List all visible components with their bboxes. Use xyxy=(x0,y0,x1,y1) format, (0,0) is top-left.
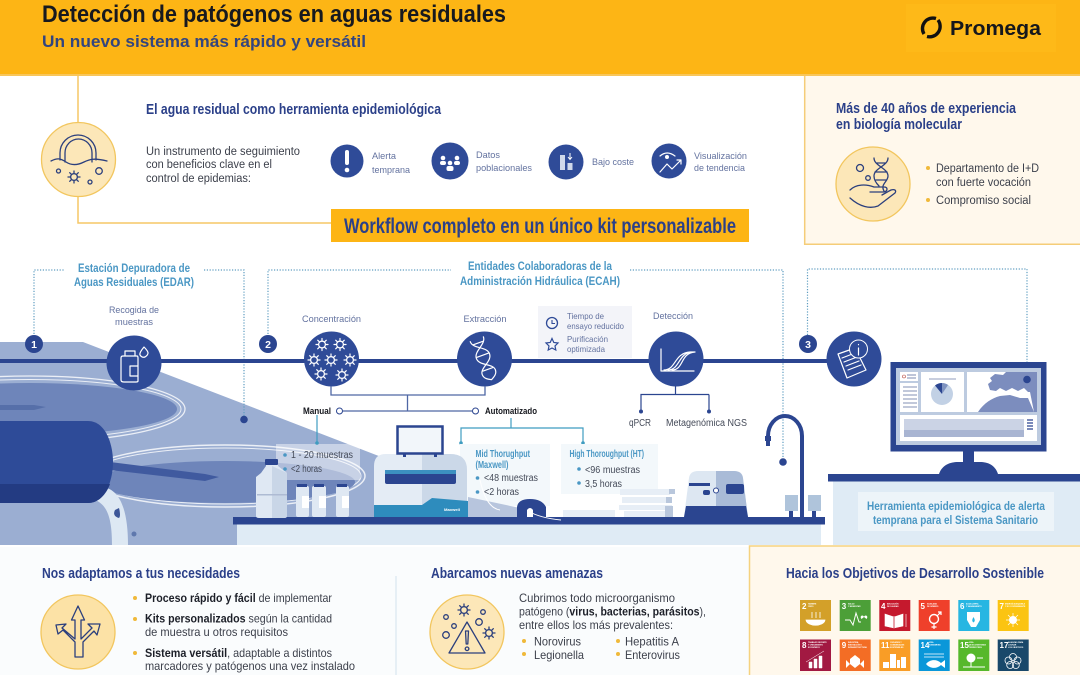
list: pathogens: Legionella xyxy=(534,648,584,662)
label: population data: poblacionales xyxy=(476,163,532,174)
tile: SDG 11: 11 xyxy=(881,641,890,650)
icon: population data xyxy=(432,142,468,180)
tile: SDG 15: DE ECOSISTEMAS xyxy=(969,644,987,646)
label: trend visualisation: de tendencia xyxy=(694,163,746,174)
label: trend visualisation: Visualización xyxy=(694,151,747,162)
step: detection xyxy=(648,311,704,386)
tile: SDG 5: DE GÉNERO xyxy=(927,605,939,608)
dashboard: time series xyxy=(900,415,1037,441)
list: adaptation points: Sistema versátil, adaptable a distintos xyxy=(145,646,332,660)
intro text xyxy=(146,146,300,185)
callout: mid throughput: Mid Thorughput xyxy=(476,448,530,460)
heading: ECAH xyxy=(460,259,620,288)
label: manual: Manual xyxy=(303,406,331,417)
callout: reduced time and optimised purification xyxy=(538,306,632,358)
heading: Abarcamos nuevas amenazas xyxy=(431,565,603,582)
tile: SDG 14: SUBMARINA xyxy=(929,644,941,646)
label: metagenomics NGS: Metagenómica NGS xyxy=(666,418,747,429)
step: reporting icon xyxy=(826,332,882,386)
list: pathogens: Hepatitis A xyxy=(625,634,679,648)
tank 1 xyxy=(0,376,185,442)
tile: SDG 8: 8 xyxy=(802,641,807,650)
tile: SDG 6: AGUA LIMPIA xyxy=(966,602,979,606)
list: adaptation points: Kits personalizados según la cantidad xyxy=(145,612,332,626)
tile: SDG 3: SALUD xyxy=(848,602,855,606)
label: Detección xyxy=(653,311,693,322)
callout: mid throughput: <2 horas xyxy=(484,487,519,498)
list: company values: Compromiso social xyxy=(936,195,1031,207)
panel: 40 years of experience xyxy=(805,76,1080,244)
icon: DNA helix xyxy=(457,332,512,386)
tile: SDG 9: 9 xyxy=(842,641,847,650)
intro text: Cubrimos todo microorganismo xyxy=(519,591,675,605)
tile: SDG 14: VIDA xyxy=(929,641,934,644)
banner: complete workflow xyxy=(331,209,749,242)
callout: mid throughput: (Maxwell) xyxy=(476,459,508,471)
tile: SDG 2: HAMBRE xyxy=(808,602,817,606)
callout: high throughput: High Thoroughput (HT) xyxy=(570,448,644,460)
tile: SDG 11: COMUNIDADES xyxy=(890,644,905,646)
subtitle: Un nuevo sistema más rápido y versátil xyxy=(42,33,366,51)
tile: SDG 17: LOS OBJETIVOS xyxy=(1008,647,1024,649)
label: muestras xyxy=(115,317,153,328)
icon: trend visualisation xyxy=(652,144,686,178)
dotted bracket: EDAR xyxy=(34,270,244,418)
tile: SDG 8: TRABAJO DECENTE xyxy=(808,641,827,644)
connector: detection split xyxy=(639,386,711,414)
tile: SDG 17: LOGRAR xyxy=(1008,644,1017,646)
tile: SDG 15: TERRESTRES xyxy=(969,647,982,649)
heading: El agua residual como herramienta epidemiológica xyxy=(146,101,442,118)
equipment: Maxwell instrument: Maxwell xyxy=(444,507,460,512)
tile: SDG 2: 2 xyxy=(802,602,807,611)
badge: step 1: 1 xyxy=(31,339,37,351)
callout: early warning tool: temprana para el Sistema Sanitario xyxy=(873,513,1038,527)
tile: SDG 11 xyxy=(879,640,910,671)
list: pathogens: Enterovirus xyxy=(625,648,680,662)
callout: manual specs xyxy=(276,415,360,480)
dotted bracket: health system xyxy=(808,269,1027,376)
scene: treatment plant background xyxy=(0,342,400,545)
tile: SDG 9 xyxy=(840,640,871,671)
intro text: patógeno (virus, bacterias, parásitos), xyxy=(519,604,706,618)
list: pathogens xyxy=(522,634,680,662)
tile: SDG 5 xyxy=(919,600,950,631)
tile: SDG 3: Y BIENESTAR xyxy=(848,605,861,608)
tablet xyxy=(398,426,442,457)
tile: SDG 3: 3 xyxy=(842,602,847,611)
panel: sustainable development goals xyxy=(750,546,1080,675)
label: qPCR: qPCR xyxy=(629,418,651,429)
tank 2 xyxy=(85,445,365,507)
list: adaptation points xyxy=(133,591,355,673)
label: automated: Automatizado xyxy=(485,406,537,417)
tile: SDG 15: VIDA xyxy=(969,641,974,644)
list: company values: con fuerte vocación xyxy=(936,177,1031,189)
tile: SDG 15 xyxy=(958,640,989,671)
callout text: Tiempo de xyxy=(567,311,604,321)
tile: SDG 4 xyxy=(879,600,910,631)
label: early warning xyxy=(372,151,411,176)
tile: SDG 7: Y NO CONTAMINANTE xyxy=(1005,605,1026,608)
tile: SDG 7 xyxy=(998,600,1029,631)
tile: SDG 17: 17 xyxy=(1000,641,1009,650)
tile: SDG 9: INNOVACIÓN E xyxy=(848,644,862,646)
dashboard: pie chart xyxy=(921,372,964,412)
icon: sample bottle and drop xyxy=(106,336,162,390)
step: concentration xyxy=(302,314,361,386)
tile: SDG 9: INFRAESTRUCTURA xyxy=(848,646,867,649)
icon: clock xyxy=(546,318,558,328)
label: low cost: Bajo coste xyxy=(592,157,634,168)
badge: step 3 xyxy=(799,335,817,353)
callout text: Purificación xyxy=(567,334,608,344)
tile: SDG 2 xyxy=(800,600,831,631)
heading: EDAR: Estación Depuradora de xyxy=(78,261,190,275)
health system desk xyxy=(828,474,1080,545)
badge: step 2: 2 xyxy=(265,339,271,351)
badge: step 2 xyxy=(259,335,277,353)
icon: wastewater circle xyxy=(42,122,116,196)
intro text: control de epidemias: xyxy=(146,173,251,185)
tile: SDG 8: ECONÓMICO xyxy=(808,646,820,649)
tile: SDG 8: Y CRECIMIENTO xyxy=(808,644,823,646)
panel: new threats xyxy=(430,565,706,669)
callout: mid throughput xyxy=(460,444,550,506)
tile: SDG 4: 4 xyxy=(881,602,886,611)
badge: step 1 xyxy=(25,335,43,353)
label: population data xyxy=(476,150,532,174)
heading: Nos adaptamos a tus necesidades xyxy=(42,565,240,582)
intro text: Un instrumento de seguimiento xyxy=(146,146,300,158)
icon: early warning xyxy=(330,144,364,178)
heading xyxy=(836,100,1017,133)
monitor with dashboard xyxy=(890,362,1046,474)
label: Extracción xyxy=(464,314,506,325)
callout: high throughput: 3,5 horas xyxy=(585,479,622,490)
tile: SDG 4: EDUCACIÓN xyxy=(887,602,899,606)
location dot xyxy=(1023,376,1031,383)
callout: manual specs: 1 - 20 muestras xyxy=(291,450,353,461)
tile: SDG 17 xyxy=(998,640,1029,671)
equipment: thermal cycler xyxy=(684,471,748,517)
tile: SDG 14: 14 xyxy=(920,641,930,650)
banner: complete workflow: Workflow completo en un único kit personalizable xyxy=(344,215,736,238)
icon: hand with DNA xyxy=(836,147,910,221)
pillar and drops xyxy=(95,487,136,545)
tile: SDG 11: CIUDADES Y xyxy=(890,641,902,644)
intro text: con beneficios clave en el xyxy=(146,159,272,171)
tile: SDG 14 xyxy=(919,640,950,671)
dashboard: map xyxy=(967,372,1037,412)
logo: Promega xyxy=(906,4,1056,52)
callout: high throughput: <96 muestras xyxy=(585,465,640,476)
list: pathogens: Norovirus xyxy=(534,634,581,648)
callout: early warning tool: Herramienta epidemiológica de alerta xyxy=(867,499,1045,513)
tile: SDG 8 xyxy=(800,640,831,671)
logo: Promega: Promega xyxy=(950,18,1042,40)
label: Concentración xyxy=(302,314,361,325)
tile: SDG 5: 5 xyxy=(920,602,926,611)
process line xyxy=(0,359,830,363)
dotted bracket: ECAH xyxy=(268,270,783,460)
bottom band xyxy=(0,547,749,675)
list: adaptation points: de muestra u otros requisitos xyxy=(145,625,288,639)
heading: EDAR: Aguas Residuales (EDAR) xyxy=(74,275,194,289)
connector: automated split xyxy=(459,418,585,445)
label: trend visualisation xyxy=(694,151,747,174)
heading: ECAH: Administración Hidráulica (ECAH) xyxy=(460,274,620,288)
callout: manual specs: <2 horas xyxy=(291,464,322,475)
list: adaptation points: Proceso rápido y fácil de implementar xyxy=(145,591,332,605)
label: early warning: temprana xyxy=(372,165,411,176)
dotted line end dots xyxy=(240,416,787,466)
tile: SDG 17: ALIANZAS PARA xyxy=(1008,641,1024,644)
dashboard: sidebar xyxy=(900,372,918,412)
icon: viruses xyxy=(304,332,359,386)
panel: wastewater as epidemiological tool xyxy=(146,101,747,185)
list: company values xyxy=(926,163,1039,207)
icon: amplification curves xyxy=(648,332,704,386)
cylinder pipe xyxy=(0,421,113,503)
panel: adapting to your needs xyxy=(41,565,355,673)
tile: SDG 6: Y SANEAMIENTO xyxy=(966,605,982,608)
bench: lab table xyxy=(233,517,825,545)
title: Detección de patógenos en aguas residuales xyxy=(42,1,506,28)
callout: high throughput xyxy=(561,444,658,494)
callout: early warning tool xyxy=(858,492,1054,531)
heading: Más de 40 años de experiencia xyxy=(836,100,1017,117)
callout: mid throughput: <48 muestras xyxy=(484,473,538,484)
label: early warning: Alerta xyxy=(372,151,397,162)
equipment: faucet xyxy=(765,416,821,518)
header band xyxy=(0,0,1080,76)
callout text xyxy=(567,311,624,354)
tile: SDG 6: 6 xyxy=(960,602,965,611)
equipment: Maxwell instrument xyxy=(374,426,520,517)
step: extraction xyxy=(457,314,512,386)
tile: SDG 11: SOSTENIBLES xyxy=(890,647,904,649)
label xyxy=(109,305,159,328)
label: population data: Datos xyxy=(476,150,500,161)
heading: ECAH: Entidades Colaboradoras de la xyxy=(468,259,612,273)
icon: diverging arrows xyxy=(41,595,115,669)
heading: EDAR xyxy=(74,261,194,289)
equipment: pump and cable xyxy=(480,480,561,520)
icon: star xyxy=(546,338,558,350)
equipment: bottle and vials xyxy=(256,459,349,518)
tile: SDG 4: DE CALIDAD xyxy=(887,605,899,608)
tile: SDG 3 xyxy=(840,600,871,631)
callout text: ensayo reducido xyxy=(567,321,624,331)
callout text: optimizada xyxy=(567,344,605,354)
tile: SDG 6 xyxy=(958,600,989,631)
tile: SDG 15: 15 xyxy=(960,641,969,650)
icon: low cost xyxy=(548,144,584,180)
tile: SDG 7: 7 xyxy=(1000,602,1004,611)
connector: epidemiological section to workflow banner xyxy=(78,76,332,223)
heading: en biología molecular xyxy=(836,116,962,133)
tile: SDG 2: CERO xyxy=(808,606,814,608)
connector: method split xyxy=(331,386,485,414)
equipment: plate stacks xyxy=(563,489,675,517)
label: Recogida de xyxy=(109,305,159,316)
icon: warning with pathogens xyxy=(430,595,504,669)
intro text: entre ellos los más prevalentes: xyxy=(519,618,673,632)
list: company values: Departamento de I+D xyxy=(936,163,1039,175)
intro text xyxy=(519,591,706,632)
badge: step 3: 3 xyxy=(805,339,811,351)
list: adaptation points: marcadores y patógenos una vez instalado xyxy=(145,659,355,673)
tile: SDG 9: INDUSTRIA, xyxy=(848,641,859,644)
tile: SDG 5: IGUALDAD xyxy=(927,602,938,606)
step: sample collection xyxy=(106,305,162,390)
tile: SDG 7: ENERGÍA ASEQUIBLE xyxy=(1005,602,1026,606)
